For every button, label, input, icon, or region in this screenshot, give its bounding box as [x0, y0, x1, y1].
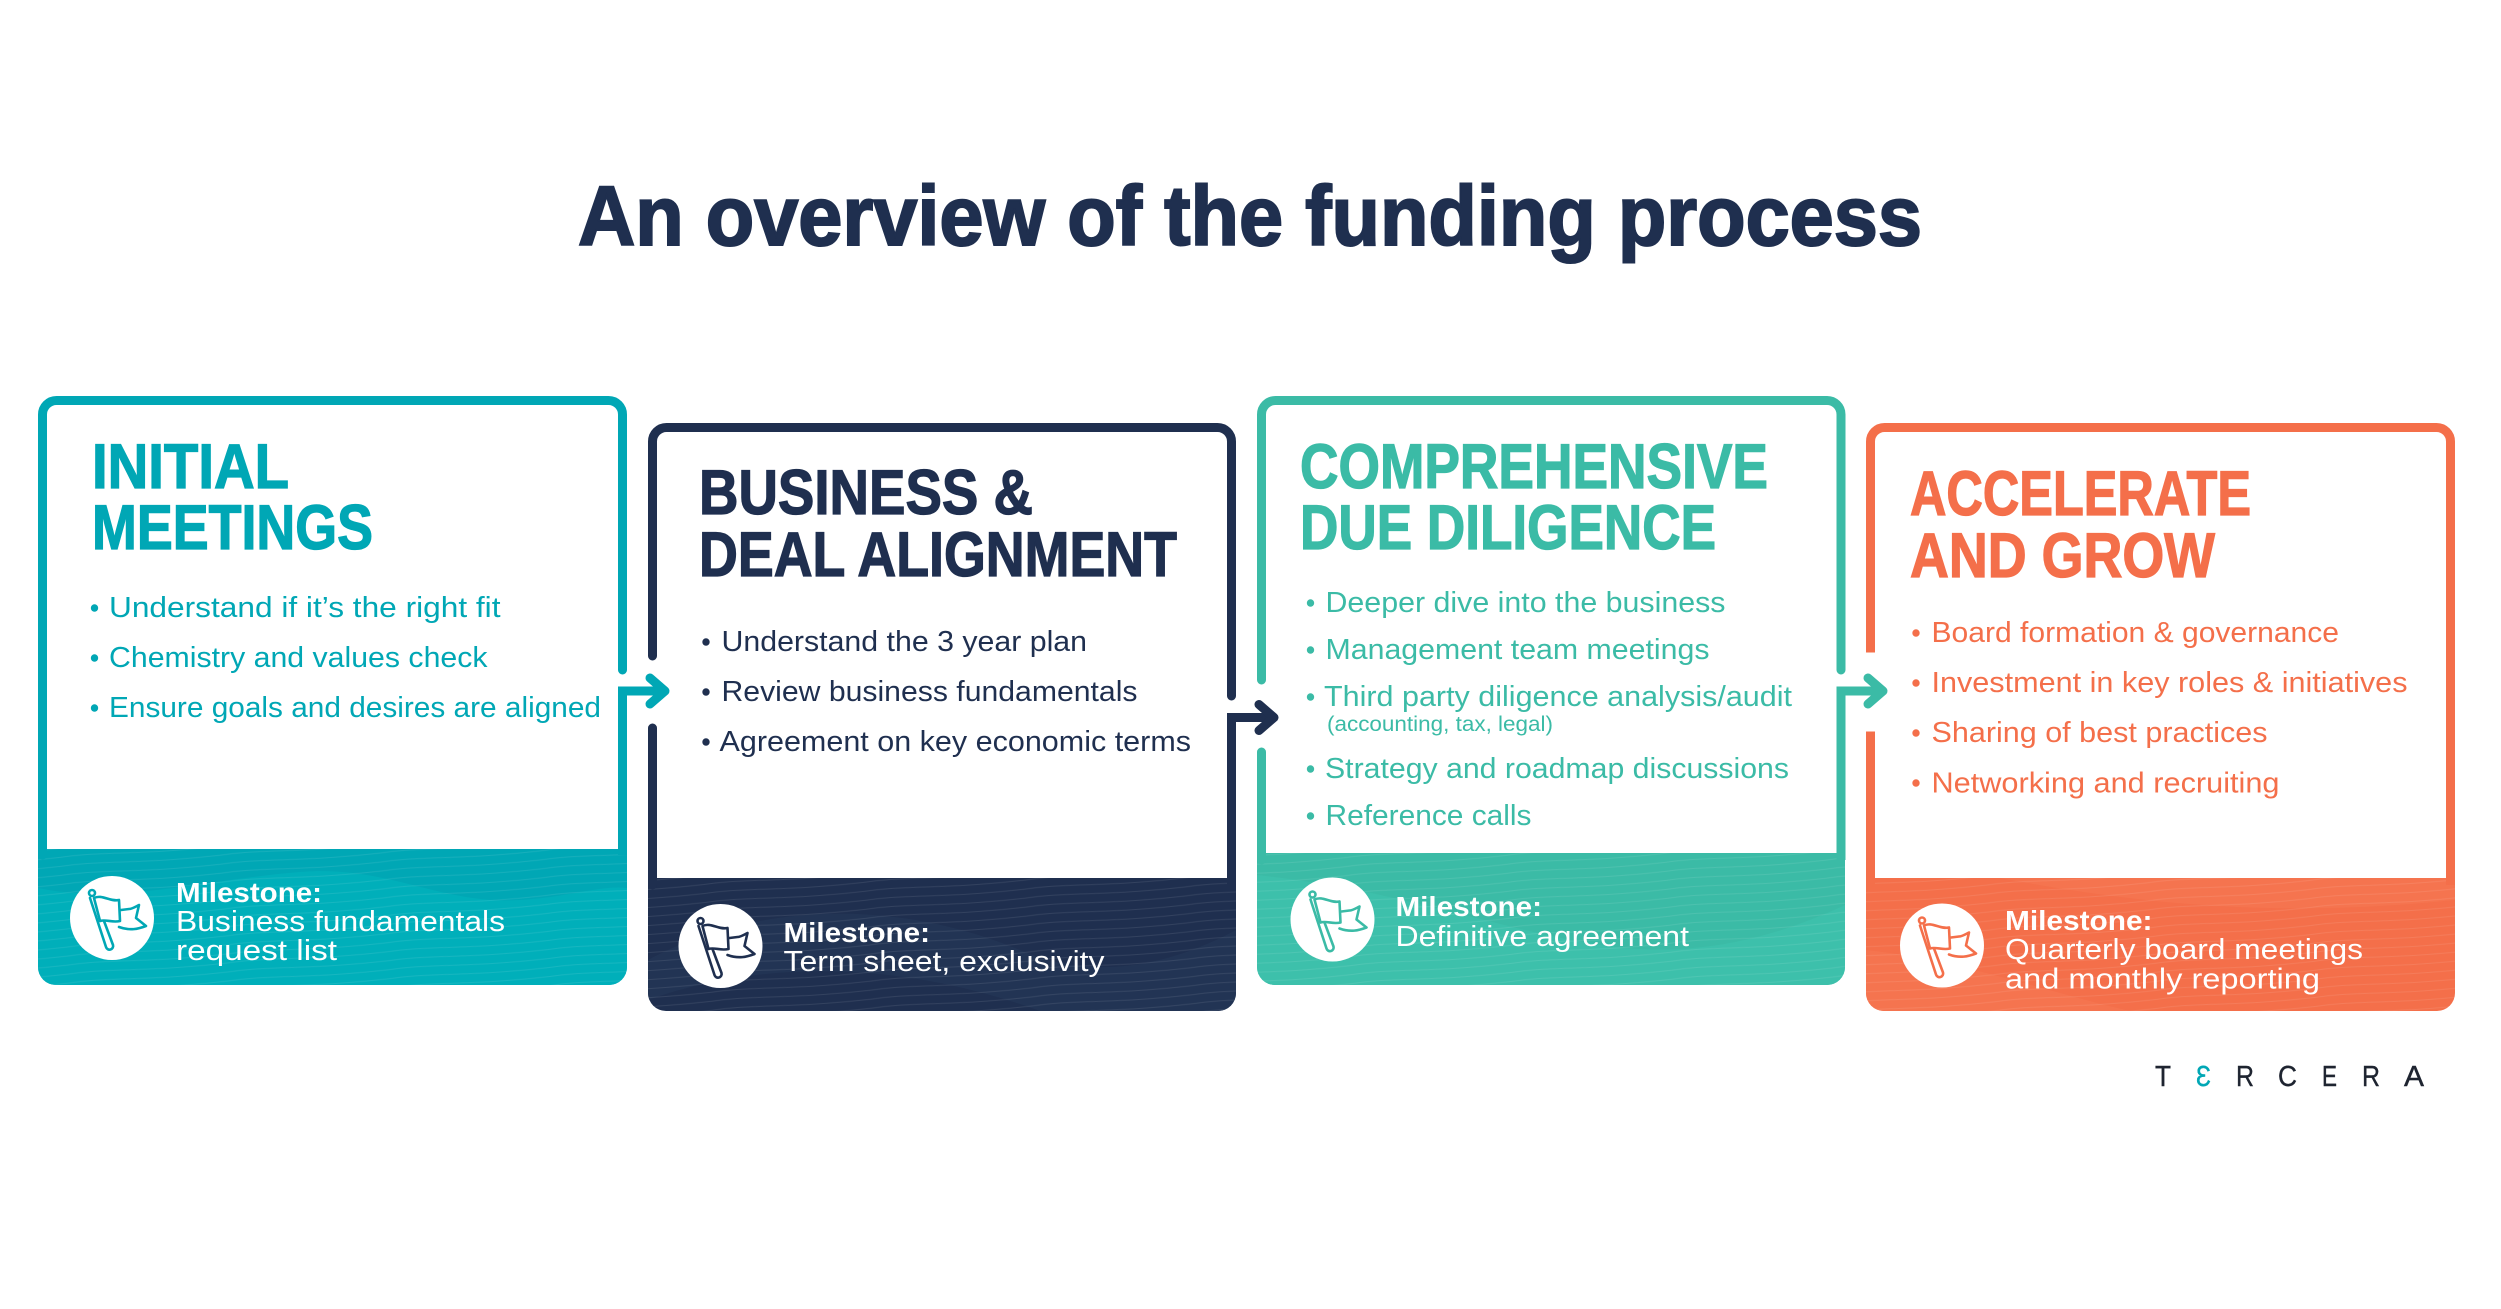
milestone band: comprehensive due diligence [1257, 853, 1845, 985]
heading: business and deal alignment: DEAL ALIGNMENT [699, 520, 1177, 590]
milestone text: comprehensive due diligence: Definitive agreement [1396, 921, 1689, 953]
bullet list: accelerate and grow: Investment in key roles & initiatives [1932, 667, 2408, 699]
heading: initial meetings: MEETINGS [92, 493, 373, 563]
heading: business and deal alignment [699, 458, 1177, 590]
milestone text: business and deal alignment [784, 917, 1105, 978]
bullet list: comprehensive due diligence: Deeper dive into the business [1326, 587, 1726, 619]
bullet list: comprehensive due diligence [1307, 587, 1792, 832]
bullet list: initial meetings: Understand if it’s the right fit [109, 592, 501, 624]
card outline: business and deal alignment [652, 428, 1232, 885]
arrow: due diligence to accelerate [1841, 678, 1883, 860]
bullet list: initial meetings: Chemistry and values check [109, 642, 488, 674]
milestone text: accelerate and grow: Quarterly board meetings [2005, 934, 2363, 966]
milestone band: business and deal alignment [648, 878, 1236, 1011]
card outline: accelerate and grow [1870, 428, 2450, 885]
milestone text: initial meetings: Business fundamentals [176, 906, 505, 938]
milestone text: accelerate and grow [2005, 905, 2363, 996]
panel: comprehensive due diligence [1257, 400, 1883, 985]
heading: comprehensive due diligence [1300, 432, 1768, 563]
card outline: initial meetings [42, 400, 622, 855]
bullet list: comprehensive due diligence: Third party diligence analysis/audit [1324, 681, 1792, 713]
milestone text: business and deal alignment: Term sheet, exclusivity [784, 946, 1105, 978]
milestone text: business and deal alignment: Milestone: [784, 917, 930, 948]
bullet list: business and deal alignment: Review business fundamentals [722, 676, 1138, 708]
arrow: initial meetings to business alignment [622, 678, 665, 855]
bullet list: comprehensive due diligence: (accounting, tax, legal) [1327, 713, 1553, 736]
milestone text: comprehensive due diligence [1396, 891, 1689, 953]
milestone band: accelerate and grow [1866, 878, 2455, 1011]
heading: accelerate and grow: ACCELERATE [1910, 459, 2251, 529]
title: An overview of the funding process [578, 169, 1922, 263]
bullet list: business and deal alignment [702, 626, 1191, 758]
heading: business and deal alignment: BUSINESS & [699, 458, 1033, 528]
logo: Tercera: C [2278, 1061, 2297, 1093]
bullet list: accelerate and grow: Board formation & governance [1932, 617, 2339, 649]
milestone text: accelerate and grow: Milestone: [2005, 905, 2152, 936]
milestone text: initial meetings: Milestone: [176, 877, 322, 908]
logo: Tercera: R [2362, 1061, 2380, 1093]
bullet list: accelerate and grow: Sharing of best practices [1932, 717, 2268, 749]
bullet list: comprehensive due diligence: Reference calls [1326, 800, 1532, 832]
icon: milestone flag [1290, 878, 1374, 962]
panel: business and deal alignment [648, 428, 1274, 1011]
logo: Tercera: E [2322, 1061, 2337, 1093]
milestone band: initial meetings [38, 849, 627, 985]
logo: Tercera [2155, 1061, 2425, 1093]
logo: Tercera: Ɛ [2196, 1061, 2211, 1093]
heading: initial meetings [92, 432, 373, 563]
heading: comprehensive due diligence: COMPREHENSIVE [1300, 432, 1768, 502]
bullet list: accelerate and grow [1912, 617, 2408, 800]
bullet list: business and deal alignment: Understand the 3 year plan [722, 626, 1087, 658]
milestone text: initial meetings: request list [176, 935, 337, 967]
logo: Tercera: R [2236, 1061, 2254, 1093]
heading: initial meetings: INITIAL [92, 432, 289, 502]
bullet list: accelerate and grow: Networking and recruiting [1932, 768, 2280, 800]
milestone text: accelerate and grow: and monthly reporting [2005, 964, 2320, 996]
bullet list: comprehensive due diligence: Management team meetings [1326, 634, 1710, 666]
bullet list: comprehensive due diligence: Strategy and roadmap discussions [1325, 753, 1789, 785]
heading: accelerate and grow: AND GROW [1910, 521, 2215, 591]
arrow: business alignment to due diligence [1232, 704, 1274, 885]
bullet list: initial meetings: Ensure goals and desires are aligned [109, 692, 601, 724]
heading: accelerate and grow [1910, 459, 2251, 591]
panel: accelerate and grow [1866, 428, 2455, 1011]
logo: Tercera: A [2404, 1061, 2425, 1093]
card outline: comprehensive due diligence [1262, 400, 1841, 860]
heading: comprehensive due diligence: DUE DILIGENCE [1300, 493, 1716, 563]
logo: Tercera: T [2155, 1061, 2171, 1093]
icon: milestone flag [1900, 904, 1984, 988]
icon: milestone flag [678, 904, 762, 988]
icon: milestone flag [70, 876, 154, 960]
panel: initial meetings [38, 400, 665, 985]
milestone text: comprehensive due diligence: Milestone: [1396, 891, 1542, 922]
milestone text: initial meetings [176, 877, 505, 967]
bullet list: business and deal alignment: Agreement on key economic terms [720, 726, 1191, 758]
bullet list: initial meetings [91, 592, 601, 724]
